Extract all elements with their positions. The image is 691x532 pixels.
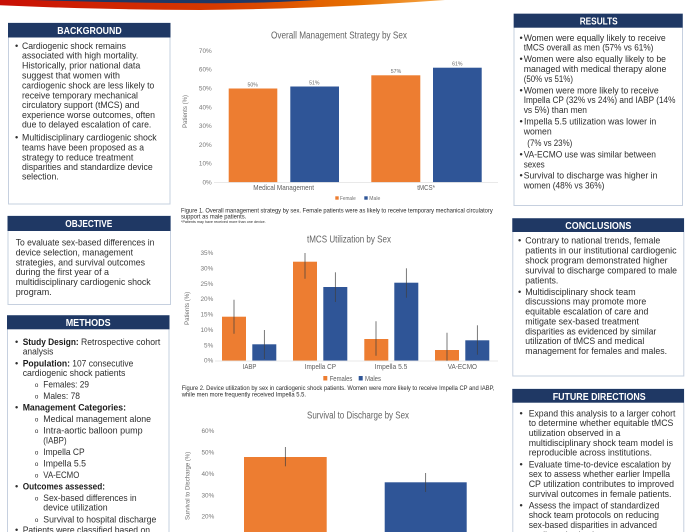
methods list: o — [35, 416, 39, 423]
data labels: 57% — [391, 69, 402, 75]
y axis labels: 0% — [202, 179, 212, 186]
methods list: • — [15, 337, 18, 347]
background text: • — [15, 41, 18, 51]
methods list: o — [35, 517, 39, 524]
background text: cardiogenic shock are less likely to — [22, 80, 154, 90]
conclusions list: patients in our institutional cardiogenic — [525, 245, 677, 255]
objective text — [16, 238, 154, 297]
future directions list: • — [520, 408, 523, 418]
category labels: Impella CP — [305, 362, 336, 371]
figure 1 caption: Figure 1. Overall management strategy by sex. Female patients were as likely to receive temporary mechanical circulatory — [181, 207, 494, 214]
background text: selection. — [22, 172, 59, 182]
methods list: Management Categories: — [23, 403, 126, 413]
y axis labels — [199, 48, 212, 186]
background text: receive temporary mechanical — [22, 90, 138, 100]
y axis labels: 15% — [201, 312, 214, 319]
y axis labels: 30% — [202, 492, 215, 499]
conclusions list: management for females and males. — [525, 346, 667, 356]
results list: Survival to discharge was higher in — [524, 171, 657, 181]
objective text: To evaluate sex-based differences in — [16, 238, 154, 248]
objective text: during the first year of a — [16, 267, 110, 277]
background text: teams have been proposed as a — [22, 142, 145, 152]
category labels: Medical Management — [253, 183, 314, 192]
heading: conclusions: CONCLUSIONS — [565, 221, 632, 232]
future directions list: survival outcomes in female patients. — [529, 489, 671, 499]
conclusions list: shock program demonstrated higher — [525, 255, 668, 265]
chart title: tMCS Utilization by Sex — [307, 235, 391, 246]
panel: results — [514, 14, 683, 206]
methods list: o — [35, 393, 39, 400]
legend: Females — [330, 374, 353, 383]
heading: objective: OBJECTIVE — [65, 219, 113, 230]
bars — [214, 68, 498, 182]
heading: methods: METHODS — [66, 318, 111, 329]
heading: future directions: FUTURE DIRECTIONS — [553, 392, 646, 403]
legend: Female — [340, 196, 356, 202]
conclusions list: mitigate sex-based treatment — [525, 316, 639, 326]
results list: Impella 5.5 utilization was lower in — [524, 117, 656, 127]
objective text: program. — [16, 287, 52, 297]
results list: (7% vs 23%) — [527, 138, 572, 148]
category labels — [253, 183, 435, 192]
y axis labels: 25% — [201, 281, 214, 288]
data labels — [248, 62, 463, 88]
conclusions list: discussions may promote more — [525, 297, 646, 307]
conclusions list: equitable escalation of care and — [525, 307, 648, 317]
bars — [215, 262, 498, 361]
results list — [520, 33, 675, 191]
y axis labels: 30% — [201, 265, 214, 272]
y axis title: Patients (%) — [182, 95, 189, 128]
data labels: 51% — [309, 80, 320, 86]
legend — [323, 374, 381, 383]
background text: strategy to reduce treatment — [22, 152, 134, 162]
panel: methods — [7, 315, 170, 532]
panel: future directions — [512, 389, 684, 532]
results list: Women were equally likely to receive — [524, 33, 666, 43]
conclusions list: patients. — [525, 275, 558, 285]
methods list: Outcomes assessed: — [23, 482, 105, 492]
conclusions list: utilization of tMCS and medical — [525, 336, 644, 346]
future directions list: reproducible across institutions. — [529, 448, 652, 458]
chart title: Overall Management Strategy by Sex — [271, 30, 407, 41]
background text: • — [15, 133, 18, 143]
figure 1 caption: *Patients may have received more than one device. — [181, 219, 266, 224]
background text: associated with high mortality. — [22, 51, 138, 61]
methods list: device utilization — [43, 503, 108, 513]
y axis labels: 30% — [199, 123, 212, 130]
background text: Historically, prior national data — [22, 61, 141, 71]
background text — [15, 41, 157, 182]
methods list: Sex-based differences in — [43, 493, 137, 503]
y axis labels: 20% — [202, 514, 215, 521]
y axis labels: 5% — [204, 342, 214, 349]
results list: Women were more likely to receive — [524, 85, 659, 95]
future directions list: multidisciplinary shock team model is — [529, 438, 673, 448]
future directions list: shock team protocols on reducing — [529, 510, 659, 520]
future directions list: sex-based disparities in advanced — [529, 520, 657, 530]
results list: vs 5%) than men — [524, 105, 587, 115]
background text: disparities and standardize device — [22, 162, 153, 172]
y axis labels: 60% — [199, 67, 212, 74]
y axis labels: 0% — [204, 358, 214, 365]
heading: results: RESULTS — [580, 17, 618, 28]
methods list: Study Design: — [23, 337, 79, 347]
conclusions list: • — [518, 236, 521, 246]
y axis labels: 70% — [199, 48, 212, 55]
objective text: device selection, management — [16, 247, 133, 257]
chart: survival to discharge by sex — [184, 410, 467, 532]
results list: • — [520, 117, 523, 127]
y axis labels: 40% — [199, 104, 212, 111]
objective text: strategies, and survival outcomes — [16, 257, 145, 267]
data labels: 61% — [452, 62, 463, 68]
y axis labels: 50% — [199, 86, 212, 92]
results list: • — [520, 171, 523, 181]
methods list — [15, 337, 161, 532]
y axis labels — [201, 250, 214, 365]
objective text: multidisciplinary cardiogenic shock — [16, 277, 151, 287]
y axis labels: 60% — [202, 428, 215, 435]
category labels: VA-ECMO — [448, 362, 477, 371]
results list: managed with medical therapy alone — [524, 64, 666, 74]
background text: experience worse outcomes, often — [22, 110, 155, 120]
y axis labels: 10% — [199, 160, 212, 168]
y axis labels: 50% — [202, 450, 215, 457]
error bars — [234, 253, 477, 361]
conclusions list: survival to discharge compared to male — [525, 265, 677, 275]
methods list: analysis — [23, 347, 54, 357]
chart: overall management strategy by sex — [182, 30, 498, 202]
y axis labels: 20% — [201, 296, 214, 303]
y axis labels: 40% — [202, 471, 215, 478]
y axis title: Patients (%) — [184, 292, 191, 325]
top banner swoosh — [0, 0, 445, 10]
category labels: IABP — [243, 362, 256, 371]
methods list: Retrospective cohort — [81, 337, 161, 347]
methods list: Population: — [23, 358, 70, 368]
methods list: • — [15, 358, 18, 368]
results list: VA-ECMO use was similar between — [524, 150, 656, 160]
legend: Male — [369, 196, 380, 202]
figure 2 caption — [181, 385, 495, 398]
conclusions list: Contrary to national trends, female — [525, 236, 660, 246]
future directions list: to determine whether equitable tMCS — [529, 418, 673, 428]
heading: background: BACKGROUND — [57, 26, 122, 37]
future directions list: sex to assess whether earlier Impella — [529, 469, 671, 479]
future directions list: CP utilization contributes to improved — [529, 479, 674, 489]
category labels: Impella 5.5 — [375, 362, 407, 371]
conclusions list: Multidisciplinary shock team — [525, 287, 636, 297]
data labels: 50% — [248, 82, 258, 88]
figure 2 caption: while men more frequently received Impella 5.5. — [181, 391, 306, 398]
results list: (50% vs 51%) — [524, 74, 573, 84]
category labels: tMCS* — [417, 183, 435, 192]
results list: • — [520, 85, 523, 95]
results list: • — [520, 33, 523, 43]
background text: due to delayed escalation of care. — [22, 120, 151, 130]
methods list: Medical management alone — [43, 414, 151, 424]
y axis labels: 10% — [201, 327, 214, 334]
panel: background — [8, 23, 170, 204]
methods list: Females: 29 — [43, 380, 89, 390]
y axis labels: 35% — [201, 250, 214, 257]
future directions list — [520, 408, 676, 532]
chart title: Survival to Discharge by Sex — [307, 410, 409, 421]
methods list: o — [35, 472, 39, 479]
conclusions list — [518, 236, 677, 356]
results list: Women were also equally likely to be — [524, 54, 666, 64]
methods list: Males: 78 — [43, 391, 80, 401]
methods list: Impella CP — [43, 447, 85, 457]
conclusions list: disparities as evidenced by similar — [525, 326, 656, 336]
conclusions list: • — [518, 287, 521, 297]
y axis labels — [202, 428, 215, 521]
future directions list: Evaluate time-to-device escalation by — [529, 459, 671, 469]
future directions list: Expand this analysis to a larger cohort — [529, 408, 676, 418]
methods list: VA-ECMO — [43, 470, 79, 480]
methods list: 107 consecutive — [72, 358, 133, 368]
bars — [244, 457, 467, 532]
methods list: • — [15, 482, 18, 492]
category labels — [243, 362, 477, 371]
background text: Multidisciplinary cardiogenic shock — [22, 133, 157, 143]
methods list: (IABP) — [43, 436, 67, 446]
y axis labels: 20% — [199, 142, 212, 149]
future directions list: • — [520, 500, 523, 510]
results list: women — [523, 126, 552, 136]
background text: suggest that women with — [22, 70, 120, 80]
methods list: Intra-aortic balloon pump — [43, 426, 143, 436]
methods list: o — [35, 449, 39, 456]
legend: Males — [365, 374, 381, 383]
results list: women (48% vs 36%) — [523, 181, 604, 191]
results list: • — [520, 150, 523, 160]
methods list: o — [35, 428, 39, 435]
future directions list: utilization observed in a — [529, 428, 621, 438]
future directions list: Assess the impact of standardized — [529, 500, 659, 510]
chart: tMCS utilization by sex — [184, 235, 498, 383]
methods list: Survival to hospital discharge — [43, 515, 156, 525]
figure 1 caption: support as male patients. — [181, 213, 247, 220]
error bars — [285, 447, 426, 492]
background text: circulatory support (tMCS) and — [22, 100, 139, 110]
results list: tMCS overall as men (57% vs 61%) — [524, 43, 653, 53]
figure 2 caption: Figure 2. Device utilization by sex in cardiogenic shock patients. Women were more likely to receive Impella CP and IABP, — [182, 385, 495, 392]
results list: • — [520, 54, 523, 64]
methods list: cardiogenic shock patients — [23, 368, 126, 378]
methods list: o — [35, 461, 39, 468]
figure 1 caption — [181, 207, 494, 224]
future directions list: • — [520, 459, 523, 469]
results list: sexes — [524, 159, 545, 169]
methods list: Impella 5.5 — [43, 459, 86, 469]
y axis title: Survival to Discharge (%) — [184, 452, 192, 520]
methods list: • — [15, 403, 18, 413]
methods list: o — [35, 382, 39, 389]
legend — [335, 196, 380, 202]
results list: Impella CP (32% vs 24%) and IABP (14% — [524, 95, 675, 105]
background text: Cardiogenic shock remains — [22, 41, 126, 51]
panel: conclusions — [512, 218, 684, 376]
methods list: o — [35, 495, 39, 502]
panel: objective — [8, 216, 170, 304]
